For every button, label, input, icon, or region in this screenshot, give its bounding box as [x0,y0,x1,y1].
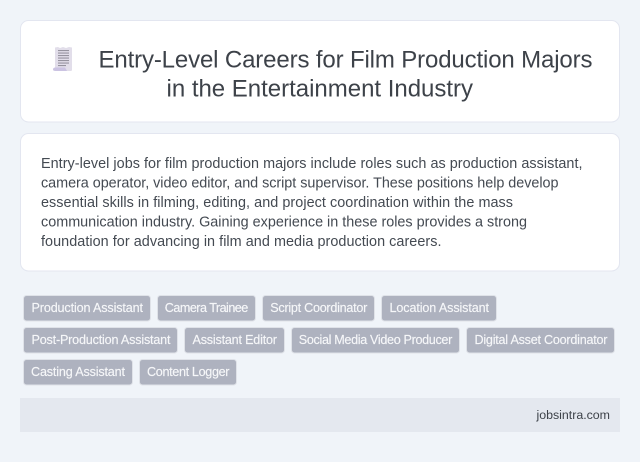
tag: Post-Production Assistant [24,328,178,353]
tag: Camera Trainee: Camera Trainee [165,301,248,315]
footer bar [20,398,620,432]
tag: Location Assistant [382,296,496,321]
tag: Location Assistant: Location Assistant [390,301,490,315]
text block: description [41,156,582,250]
title: Entry-Level Careers for Film Production Majors [98,46,592,74]
tag: Assistant Editor: Assistant Editor [192,333,277,347]
tag: Assistant Editor [184,328,284,353]
tag: Casting Assistant: Casting Assistant [31,365,126,379]
tag: Digital Asset Coordinator [466,328,614,353]
text block: description: camera operator, video editor, and script supervisor. These positions help develop [41,175,558,191]
tag list [24,296,614,385]
tag: Post-Production Assistant: Post-Production Assistant [32,333,171,347]
panel: description card [20,134,620,271]
tag: Content Logger: Content Logger [147,365,230,379]
text block: description: Entry-level jobs for film production majors include roles such as production assistant, [41,156,582,172]
tag: Script Coordinator [262,296,374,321]
text block: description: foundation for advancing in film and media production careers. [41,234,442,250]
tag: Script Coordinator: Script Coordinator [270,301,367,315]
panel: title card [20,20,620,122]
tag: Production Assistant [24,296,150,321]
footer text: source: jobsintra.com [536,408,610,422]
tag: Social Media Video Producer: Social Media Video Producer [299,333,452,347]
text block: description: essential skills in filming, editing, and project coordination within the mass [41,195,513,211]
tag: Digital Asset Coordinator: Digital Asset Coordinator [474,333,608,347]
tag: Camera Trainee [158,296,256,321]
tag: Production Assistant: Production Assistant [32,301,144,315]
tag: Social Media Video Producer [292,328,460,353]
tag: Casting Assistant [24,360,132,385]
title [98,46,592,102]
icon: document scroll [53,47,72,71]
tag: Content Logger [140,360,236,385]
text block: description: communication industry. Gaining experience in these roles provides a strong [41,214,527,230]
title: in the Entertainment Industry [166,76,473,102]
